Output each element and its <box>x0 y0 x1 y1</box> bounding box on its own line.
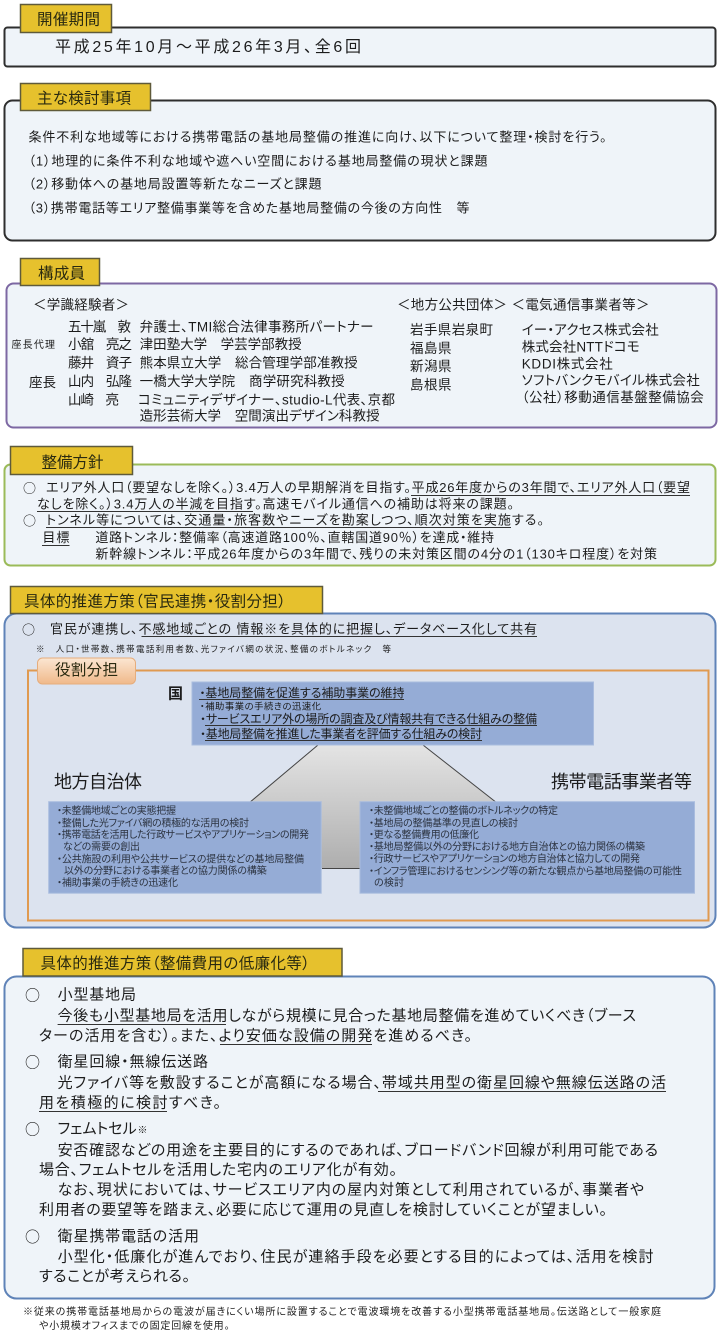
text: 小型基地局: ターの活用を含む）。また、より安価な設備の開発を進めるべき。 <box>39 1028 472 1044</box>
panel: 開催期間 <box>4 4 716 66</box>
text: telecom operators: イー・アクセス株式会社 <box>522 322 659 338</box>
text: academic experts: 座長 <box>29 375 56 390</box>
text: local governments: 福島県 <box>410 341 452 356</box>
text: 衛星回線・無線伝送路: 用を積極的に検討すべき。 <box>39 1094 221 1112</box>
text: telecom operators: 株式会社NTTドコモ <box>522 340 640 354</box>
text: 衛星回線・無線伝送路: 光ファイバ等を敷設することが高額になる場合、帯域共用型の衛星回線や無線伝送路の活 <box>58 1074 666 1092</box>
text: フェムトセル: なお、現状においては、サービスエリア内の屋内対策として利用されているが、事業者や <box>58 1182 644 1198</box>
heading: 具体的推進方策（官民連携・役割分担） <box>10 586 322 614</box>
panel: 整備費用の低廉化等 <box>4 948 714 1298</box>
text: 小型基地局: ○ <box>25 984 40 1006</box>
footnote: ※従来の携帯電話基地局からの電波が届きにくい場所に設置することで電波環境を改善する小型携帯電話基地局。伝送路として一般家庭 <box>23 1305 661 1318</box>
text: 衛星携帯電話の活用 <box>25 1226 654 1285</box>
panel: 主な検討事項 <box>4 84 716 240</box>
text: academic experts: 山崎 亮 <box>68 392 119 408</box>
heading: 整備方針 <box>10 446 132 474</box>
text: telecom operators <box>512 296 704 405</box>
heading: 役割分担: 役割分担 <box>55 661 118 679</box>
text: note on information: ※ 人口・世帯数、携帯電話利用者数、光ファイバ網の状況、整備のボトルネック 等 <box>36 644 391 654</box>
panel: 官民連携・役割分担 <box>4 586 716 928</box>
text: study items: （2）移動体への基地局設置等新たなニーズと課題 <box>28 176 322 192</box>
text: フェムトセル <box>25 1118 658 1218</box>
panel: 整備方針 <box>4 446 716 566</box>
text: フェムトセル: フェムトセル <box>58 1120 137 1138</box>
box: 地方自治体の役割 <box>49 802 321 893</box>
text: period: 平成25年10月～平成26年3月、全6回 <box>55 38 361 56</box>
text: academic experts: 座長代理 <box>12 339 55 351</box>
text: フェムトセル: ○ <box>25 1118 40 1140</box>
text: public-private cooperation: 官民が連携し、不感地域ごとの 情報※を具体的に把握し、データベース化して共有 <box>50 622 537 636</box>
heading: 整備方針: 整備方針 <box>42 454 104 472</box>
heading: 主な検討事項 <box>20 84 150 110</box>
text: public-private cooperation: ○ <box>22 620 35 638</box>
text: 衛星回線・無線伝送路: 衛星回線・無線伝送路 <box>58 1054 208 1070</box>
text: telecom operators: ＜電気通信事業者等＞ <box>512 296 650 312</box>
text: academic experts <box>12 298 395 424</box>
text: local governments: 島根県 <box>410 378 452 392</box>
footnote <box>23 1305 661 1332</box>
box: 地方自治体の役割: ・整備した光ファイバ網の積極的な活用の検討 <box>57 816 249 830</box>
text: policy bullets: なしを除く。）3.4万人の半減を目指す。高速モバイル通信への補助は将来の課題。 <box>37 496 514 512</box>
box: 携帯電話事業者等の役割 <box>360 802 694 893</box>
box: 携帯電話事業者等の役割: ・基地局整備以外の分野における地方自治体との協力関係の構築 <box>369 840 645 853</box>
heading: 開催期間: 開催期間 <box>37 10 100 28</box>
box: 地方自治体の役割: ・未整備地域ごとの実態把握 <box>57 804 176 817</box>
box: 携帯電話事業者等の役割: ・インフラ管理におけるセンシング等の新たな観点から基地局整備の可能性 <box>369 864 682 878</box>
box: 国の役割: ・基地局整備を推進した事業者を評価する仕組みの検討 <box>200 726 482 741</box>
heading: 主な検討事項: 主な検討事項 <box>37 90 131 108</box>
panel: 構成員 <box>6 258 716 428</box>
heading: 具体的推進方策（整備費用の低廉化等） <box>23 948 342 976</box>
heading: 具体的推進方策（官民連携・役割分担）: 具体的推進方策（官民連携・役割分担） <box>24 592 286 610</box>
text: local governments: 岩手県岩泉町 <box>410 322 494 338</box>
heading: 具体的推進方策（整備費用の低廉化等）: 具体的推進方策（整備費用の低廉化等） <box>40 954 310 972</box>
box: 国の役割: ・基地局整備を促進する補助事業の維持 <box>200 685 404 700</box>
text: 衛星携帯電話の活用: ○ <box>25 1226 40 1247</box>
text: study items: （1）地理的に条件不利な地域や遮へい空間における基地局整備の現状と課題 <box>28 154 488 168</box>
text: academic experts: 熊本県立大学 総合管理学部准教授 <box>140 356 358 370</box>
box: 地方自治体の役割: 以外の分野における事業者との協力関係の構築 <box>64 864 267 877</box>
text: policy bullets: ○ <box>23 478 36 497</box>
text: academic experts: 津田塾大学 学芸学部教授 <box>140 337 302 352</box>
box: 地方自治体の役割: ・携帯電話を活用した行政サービスやアプリケーションの開発 <box>57 828 309 841</box>
text: local governments: ＜地方公共団体＞ <box>397 298 507 312</box>
text: 衛星回線・無線伝送路: ○ <box>25 1052 40 1072</box>
text: policy bullets: ○ <box>23 510 36 530</box>
text: policy bullets: トンネル等については、交通量・旅客数やニーズを勘案しつつ、順次対策を実施する。 <box>46 512 544 528</box>
text: study items: 条件不利な地域等における携帯電話の基地局整備の推進に向け、以下について整理・検討を行う。 <box>28 130 606 144</box>
heading: 構成員 <box>20 258 100 286</box>
text: policy bullets: 道路トンネル：整備率（高速道路100％、直轄国道90％）を達成・維持 <box>95 530 494 545</box>
text: academic experts: 一橋大学大学院 商学研究科教授 <box>140 373 345 389</box>
text: academic experts: 弁護士、TMI総合法律事務所パートナー <box>140 320 374 334</box>
text: policy bullets: 目標 <box>42 530 69 545</box>
text: study items: （3）携帯電話等エリア整備事業等を含めた基地局整備の今後の方向性 等 <box>28 200 470 216</box>
diagram: connecting trapezoid <box>249 745 497 868</box>
text: 小型基地局: 小型基地局 <box>58 986 136 1004</box>
text: academic experts: 五十嵐 敦 <box>68 318 132 334</box>
text: academic experts: 造形芸術大学 空間演出デザイン科教授 <box>140 408 380 424</box>
text: フェムトセル: 安否確認などの用途を主要目的にするのであれば、ブロードバンド回線が利用可能である <box>58 1141 658 1159</box>
heading: 役割分担 <box>38 658 136 684</box>
box: 国の役割: ・補助事業の手続きの迅速化 <box>200 701 321 712</box>
box: 地方自治体の役割: などの需要の創出 <box>63 841 140 853</box>
text: 衛星回線・無線伝送路 <box>25 1052 666 1112</box>
text: 衛星携帯電話の活用: 衛星携帯電話の活用 <box>58 1228 199 1245</box>
text: academic experts: 山内 弘隆 <box>68 374 132 389</box>
box: 携帯電話事業者等の役割: ・未整備地域ごとの整備のボトルネックの特定 <box>369 804 558 817</box>
box: 携帯電話事業者等の役割: の検討 <box>374 876 404 889</box>
text: study items <box>28 130 606 216</box>
text: フェムトセル: 場合、フェムトセルを活用した宅内のエリア化が有効。 <box>39 1162 397 1178</box>
label: 国: 国 <box>168 682 183 704</box>
box: 国の役割: ・サービスエリア外の場所の調査及び情報共有できる仕組みの整備 <box>200 712 537 726</box>
text: telecom operators: ソフトバンクモバイル株式会社 <box>522 373 700 388</box>
box: 国の役割 <box>192 682 594 745</box>
label: 地方自治体: 地方自治体 <box>54 772 142 792</box>
heading: 構成員: 構成員 <box>38 264 85 282</box>
text: policy bullets: 新幹線トンネル：平成26年度からの3年間で、残りの未対策区間の4分の1（130キロ程度）を対策 <box>95 546 657 562</box>
text: 衛星携帯電話の活用: することが考えられる。 <box>39 1268 190 1285</box>
box: 携帯電話事業者等の役割: ・行政サービスやアプリケーションの地方自治体と協力しての開発 <box>369 852 640 865</box>
label: 携帯電話事業者等: 携帯電話事業者等 <box>551 772 692 792</box>
text: フェムトセル: ※ <box>138 1126 148 1136</box>
text: academic experts: コミュニティデザイナー、studio-L代表、京都 <box>138 392 395 408</box>
text: フェムトセル: 利用者の要望等を踏まえ、必要に応じて運用の見直しを検討していくことが望ましい。 <box>39 1200 607 1218</box>
heading: 開催期間 <box>20 4 112 32</box>
text: 衛星携帯電話の活用: 小型化・低廉化が進んでおり、住民が連絡手段を必要とする目的によっては、活用を検討 <box>58 1248 654 1266</box>
footnote: や小規模オフィスまでの固定回線を使用。 <box>39 1319 230 1332</box>
text: academic experts: 小舘 亮之 <box>68 336 132 352</box>
text: policy bullets <box>23 478 690 562</box>
text: policy bullets: エリア外人口（要望なしを除く。）3.4万人の早期解消を目指す。平成26年度からの3年間で、エリア外人口（要望 <box>46 480 690 495</box>
box: 携帯電話事業者等の役割: ・更なる整備費用の低廉化 <box>369 828 479 841</box>
text: local governments <box>397 298 507 392</box>
box: 地方自治体の役割: ・公共施設の利用や公共サービスの提供などの基地局整備 <box>57 852 304 866</box>
text: 小型基地局: 今後も小型基地局を活用しながら規模に見合った基地局整備を進めていくべき（ブース <box>58 1006 636 1024</box>
text: telecom operators: KDDI株式会社 <box>522 356 613 372</box>
box: 携帯電話事業者等の役割: ・基地局の整備基準の見直しの検討 <box>369 816 518 830</box>
text: academic experts: 藤井 資子 <box>68 356 132 370</box>
box: 地方自治体の役割: ・補助事業の手続きの迅速化 <box>57 876 178 889</box>
text: 小型基地局 <box>25 984 636 1044</box>
text: telecom operators: （公社）移動通信基盤整備協会 <box>522 389 704 405</box>
panel: 役割分担 frame <box>28 670 708 920</box>
text: local governments: 新潟県 <box>410 359 452 374</box>
text: academic experts: ＜学識経験者＞ <box>33 298 129 312</box>
